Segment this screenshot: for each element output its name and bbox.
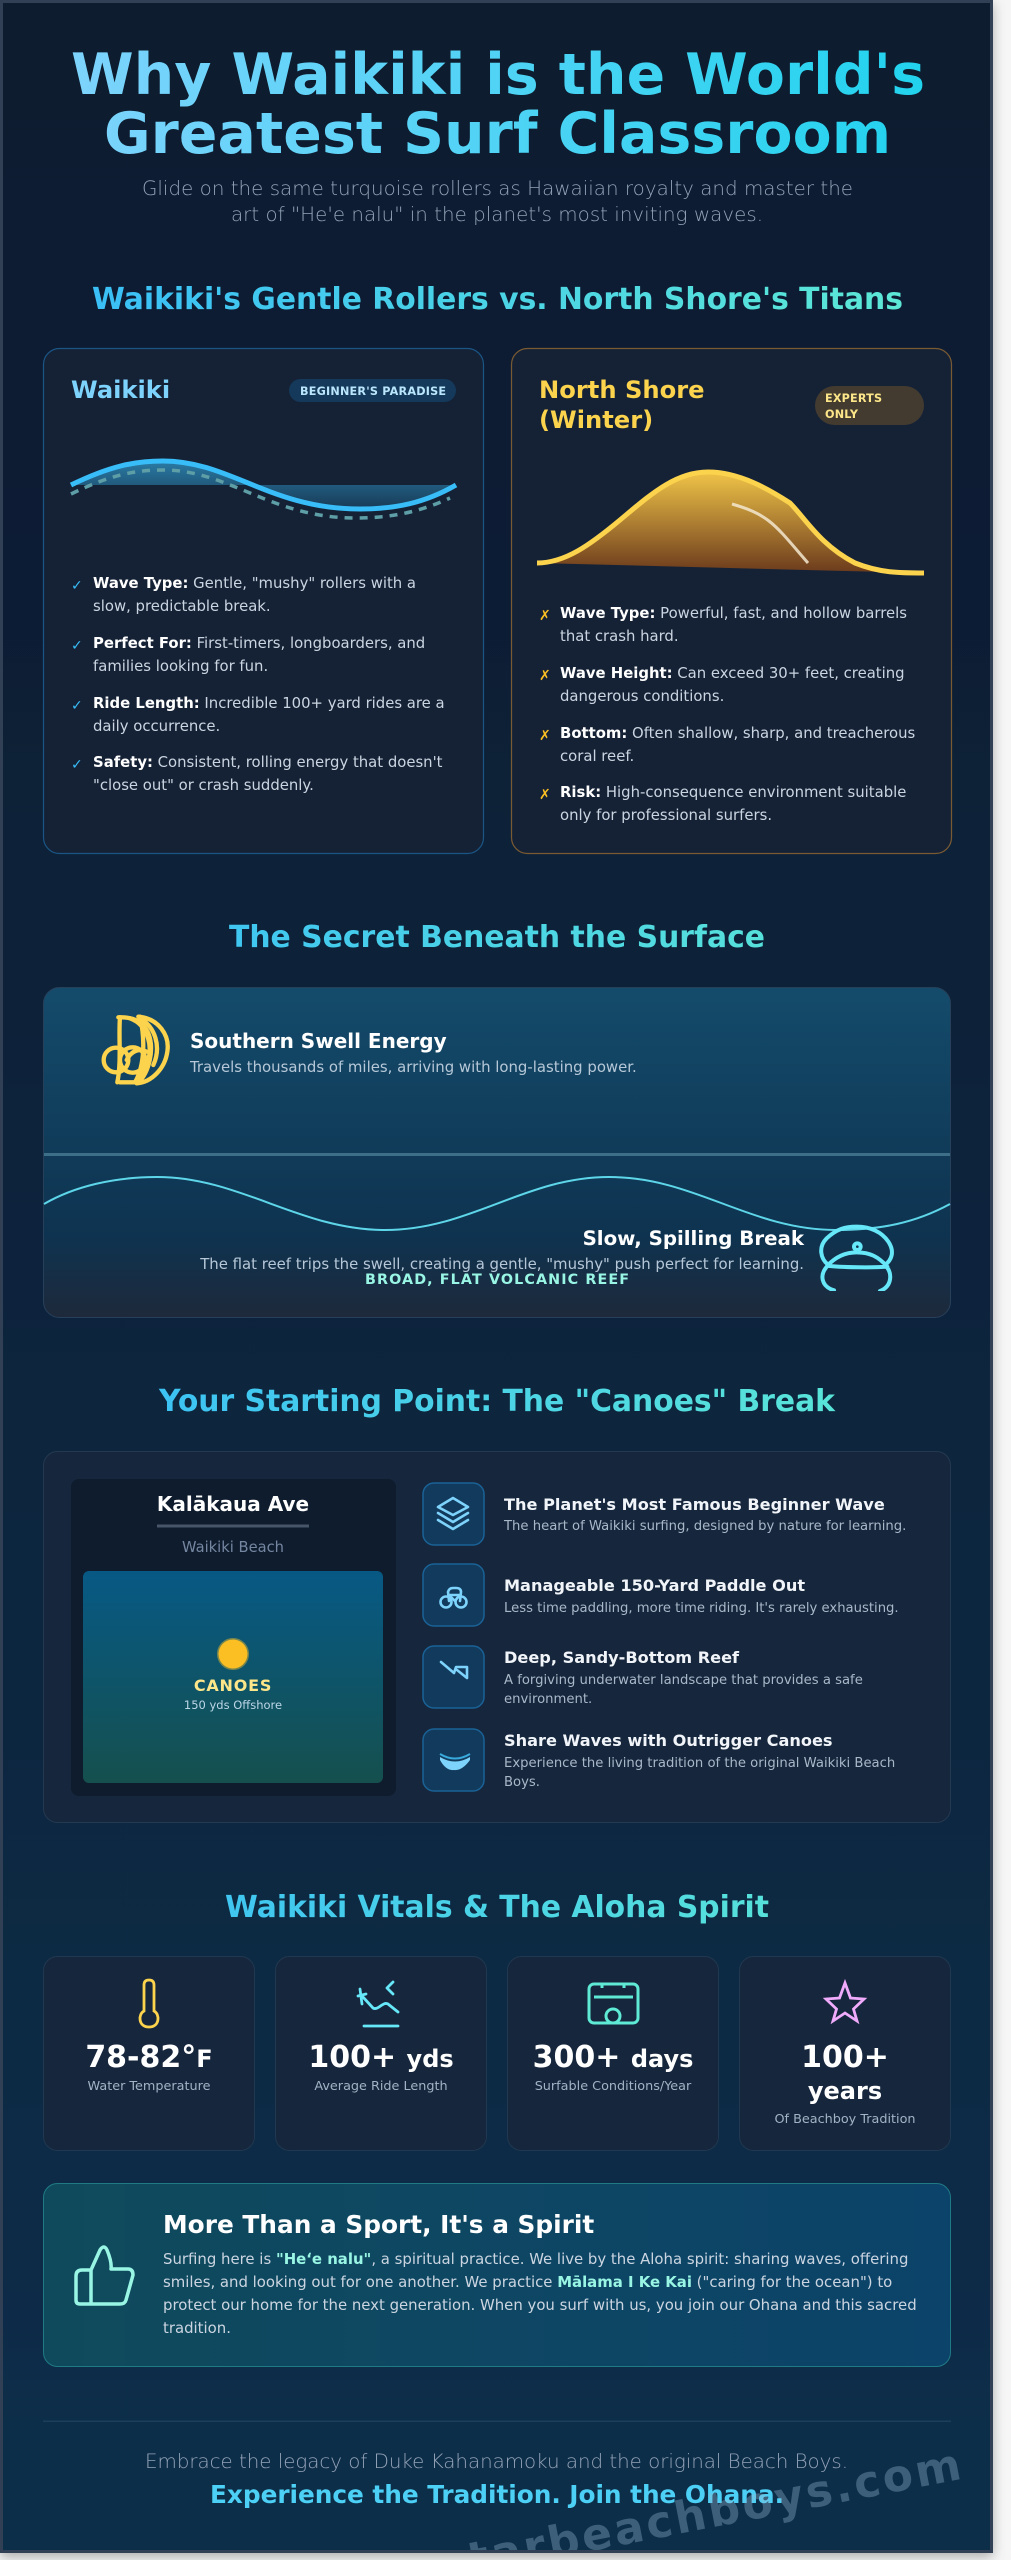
feature: most famous beginner wave: The heart of Waikiki surfing, designed by nature for learning. xyxy=(503,1519,906,1534)
feature: most famous beginner wave xyxy=(423,1483,906,1545)
stat card: water temperature xyxy=(44,1956,254,2150)
footer text: Embrace the legacy of Duke Kahanamoku and the original Beach Boys. xyxy=(145,2450,848,2473)
panel: North Shore xyxy=(512,348,952,854)
map: Kalākaua Ave xyxy=(157,1492,309,1516)
icon: calendar xyxy=(589,1984,638,2023)
list: North Shore facts: Wave Type: Powerful, fast, and hollow barrels xyxy=(560,604,907,622)
wave diagram: gentle roller xyxy=(71,461,456,518)
list: Waikiki facts: ✓ xyxy=(71,578,83,594)
heading: secret beneath: The Secret Beneath the Surface xyxy=(229,920,765,955)
map: Waikiki Beach xyxy=(182,1539,284,1556)
footer call to action: Experience the Tradition. Join the Ohana. xyxy=(210,2480,784,2509)
map: CANOES xyxy=(194,1676,272,1695)
title xyxy=(71,42,925,167)
heading: canoes: Your Starting Point: The "Canoes" Break xyxy=(158,1384,836,1419)
stat card: beachboy tradition: 100+ xyxy=(801,2040,889,2075)
stat card: ride length: 100+ yds xyxy=(308,2040,454,2075)
text: southern swell energy xyxy=(189,1029,637,1076)
list: North Shore facts: that crash hard. xyxy=(560,627,679,645)
stat card: water temperature: 78-82°F xyxy=(85,2040,213,2075)
stat card: surfable days xyxy=(508,1956,718,2150)
list: Waikiki facts: ✓ xyxy=(71,638,83,654)
stat card: beachboy tradition: Of Beachboy Tradition xyxy=(774,2112,916,2127)
paragraph: aloha spirit: tradition. xyxy=(163,2319,231,2337)
list: North Shore facts: coral reef. xyxy=(560,747,634,765)
heading: North Shore xyxy=(539,376,705,434)
panel: spirit xyxy=(44,2184,950,2366)
map xyxy=(71,1479,396,1796)
icon: reef xyxy=(821,1227,892,1291)
label: volcanic reef: BROAD, FLAT VOLCANIC REEF xyxy=(365,1272,629,1288)
text: slow spilling break: The flat reef trips the swell, creating a gentle, "mushy" push perfect for learning. xyxy=(199,1255,804,1273)
stat card: ride length: Average Ride Length xyxy=(314,2079,448,2094)
list: North Shore facts: only for professional surfers. xyxy=(560,806,772,824)
wave line xyxy=(44,1177,950,1230)
feature: outrigger canoes: Share Waves with Outrigger Canoes xyxy=(504,1731,833,1750)
icon: wave xyxy=(358,1982,398,2026)
heading: more than a sport: More Than a Sport, It's a Spirit xyxy=(163,2210,594,2239)
badge: beginner's paradise xyxy=(289,379,456,402)
list: Waikiki facts: Perfect For: First-timers, longboarders, and xyxy=(93,634,425,652)
list: Waikiki facts: ✓ xyxy=(71,698,83,714)
feature: paddle out: Less time paddling, more time riding. It's rarely exhausting. xyxy=(504,1601,899,1616)
badge: experts only: EXPERTS xyxy=(825,392,882,405)
panel: canoes break xyxy=(44,1452,950,1822)
stat card: beachboy tradition xyxy=(740,1956,950,2150)
paragraph: aloha spirit: protect our home for the next generation. When you surf with us, you join our Ohana and this sacred xyxy=(163,2296,917,2314)
panel: secret beneath the surface xyxy=(44,988,950,1318)
stat card: surfable days: Surfable Conditions/Year xyxy=(535,2079,692,2094)
stat card: surfable days: 300+ days xyxy=(533,2040,693,2075)
feature: outrigger canoes: Experience the living tradition of the original Waikiki Beach xyxy=(504,1756,895,1771)
stat card: ride length xyxy=(276,1956,486,2150)
list: Waikiki facts: ✓ xyxy=(71,757,83,773)
subtitle xyxy=(142,177,853,226)
wave diagram: hollow barrel xyxy=(537,472,924,573)
list: Waikiki facts: daily occurrence. xyxy=(93,717,220,735)
map: 150 yds Offshore xyxy=(184,1698,282,1712)
list: Waikiki facts: Ride Length: Incredible 100+ yard rides are a xyxy=(93,694,445,712)
feature: sandy-bottom reef: environment. xyxy=(504,1692,592,1707)
heading: rollers vs titans: Waikiki's Gentle Rollers vs. North Shore's Titans xyxy=(92,282,903,317)
subtitle: art of "He'e nalu" in the planet's most inviting waves. xyxy=(231,203,763,226)
icon: thumbs up xyxy=(76,2247,133,2304)
list: North Shore facts: ✗ xyxy=(539,787,551,803)
subtitle: Glide on the same turquoise rollers as Hawaiian royalty and master the xyxy=(142,177,853,200)
icon: swell xyxy=(104,1017,168,1083)
list: North Shore facts: Bottom: Often shallow, sharp, and treacherous xyxy=(560,724,916,742)
list: Waikiki facts xyxy=(71,574,445,794)
icon: thermometer xyxy=(140,1980,158,2027)
list: North Shore facts: dangerous conditions. xyxy=(560,687,724,705)
paragraph: aloha spirit: Surfing here is "Heʻe nalu", a spiritual practice. We live by the Aloha spirit: sharing waves, offering xyxy=(163,2250,908,2268)
stat card: beachboy tradition: years xyxy=(808,2077,882,2105)
feature: outrigger canoes: Boys. xyxy=(504,1775,540,1790)
feature: sandy-bottom reef: A forgiving underwater landscape that provides a safe xyxy=(504,1673,863,1688)
list: North Shore facts: Wave Height: Can exceed 30+ feet, creating xyxy=(560,664,905,682)
title: Why Waikiki is the World's xyxy=(71,42,925,108)
list: Waikiki facts: families looking for fun. xyxy=(93,657,268,675)
list: Waikiki facts: slow, predictable break. xyxy=(93,597,271,615)
feature: most famous beginner wave: The Planet's Most Famous Beginner Wave xyxy=(504,1495,885,1514)
list: Waikiki facts: "close out" or crash suddenly. xyxy=(93,776,314,794)
paragraph: aloha spirit: smiles, and looking out for one another. We practice Mālama I Ke Kai ("caring for the ocean") to xyxy=(163,2273,892,2291)
list: Waikiki facts: Safety: Consistent, rolling energy that doesn't xyxy=(93,753,443,771)
heading: vitals: Waikiki Vitals & The Aloha Spirit xyxy=(225,1890,769,1925)
text: southern swell energy: Travels thousands of miles, arriving with long-lasting power. xyxy=(189,1058,637,1076)
feature: paddle out: Manageable 150-Yard Paddle Out xyxy=(504,1576,805,1595)
badge: experts only xyxy=(815,386,924,425)
text: southern swell energy: Southern Swell Energy xyxy=(190,1029,447,1053)
stat card: water temperature: Water Temperature xyxy=(88,2079,211,2094)
list: Waikiki facts: Wave Type: Gentle, "mushy" rollers with a xyxy=(93,574,416,592)
badge: experts only: ONLY xyxy=(825,408,859,421)
list: North Shore facts xyxy=(539,604,916,824)
heading: North Shore: North Shore xyxy=(539,376,705,404)
feature: paddle out xyxy=(423,1564,899,1626)
icon: star xyxy=(826,1983,864,2021)
list: North Shore facts: ✗ xyxy=(539,608,551,624)
panel: Waikiki xyxy=(44,348,484,854)
list: North Shore facts: ✗ xyxy=(539,668,551,684)
badge: beginner's paradise: BEGINNER'S PARADISE xyxy=(300,385,446,398)
text: slow spilling break: Slow, Spilling Break xyxy=(583,1227,805,1250)
feature: sandy-bottom reef: Deep, Sandy-Bottom Reef xyxy=(504,1648,740,1667)
text: slow spilling break xyxy=(199,1227,805,1273)
feature: sandy-bottom reef xyxy=(423,1646,863,1708)
paragraph: aloha spirit xyxy=(163,2250,917,2337)
list: North Shore facts: ✗ xyxy=(539,728,551,744)
heading: Waikiki: Waikiki xyxy=(71,376,170,404)
list: North Shore facts: Risk: High-consequence environment suitable xyxy=(560,783,906,801)
title: Greatest Surf Classroom xyxy=(104,101,891,167)
feature: outrigger canoes xyxy=(423,1729,895,1791)
heading: North Shore: (Winter) xyxy=(539,406,653,434)
